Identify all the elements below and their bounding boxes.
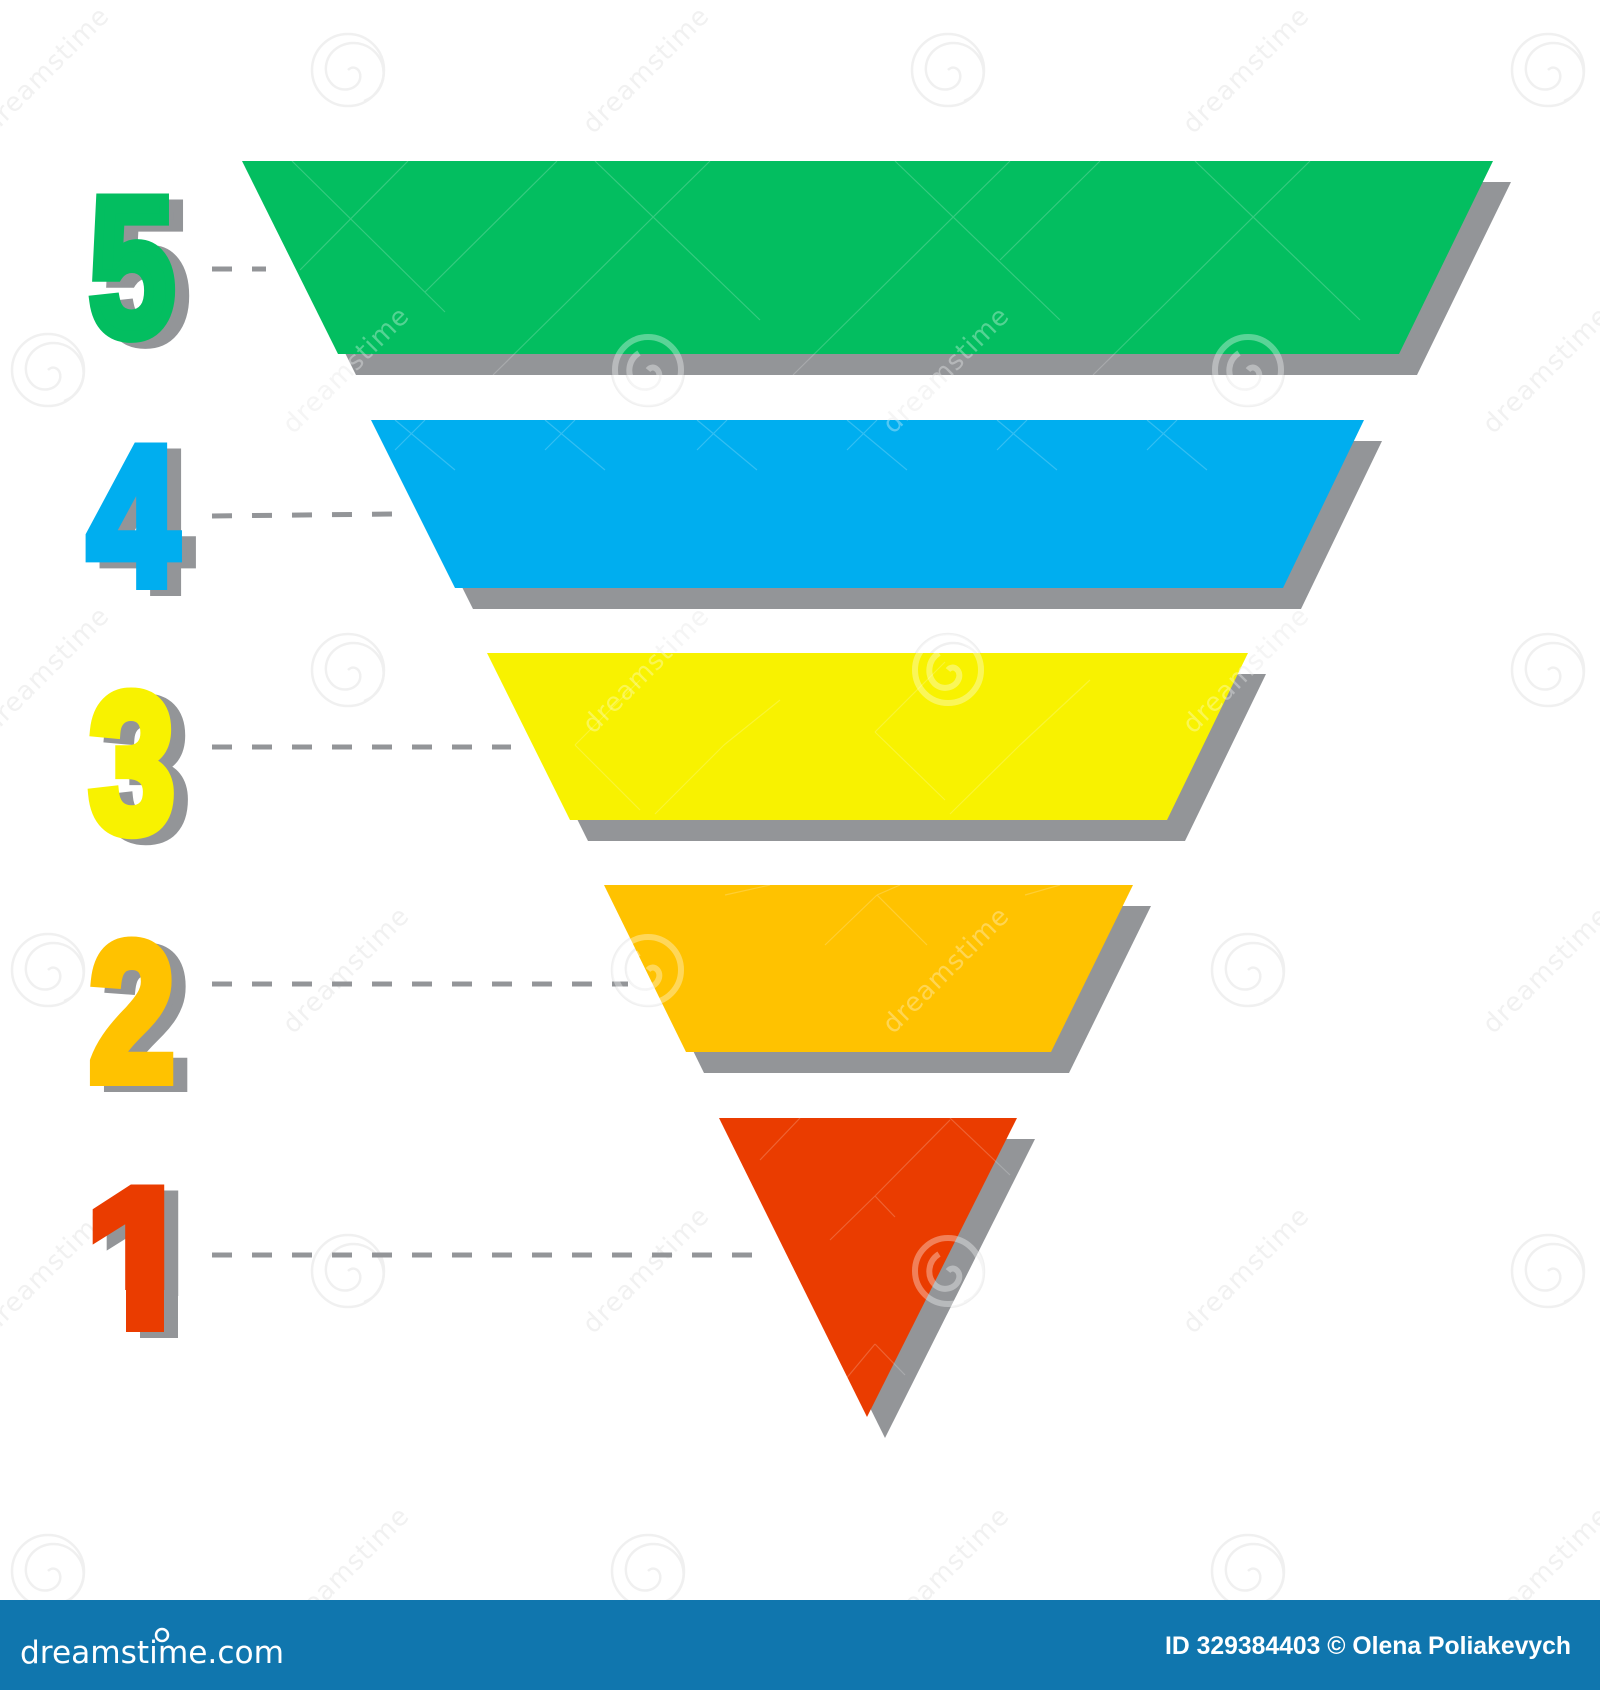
funnel tier 1: red triangle [719, 1118, 1035, 1438]
funnel tier 5: green [242, 161, 1511, 375]
watermark text on white: dreamstime [1177, 601, 1316, 740]
footer bar [0, 1600, 1600, 1690]
number 4: 4 [88, 407, 178, 627]
watermark text over shapes: dreamstime [877, 901, 1016, 1040]
number 5: 5 [89, 158, 175, 377]
dashed leader 1 [212, 1252, 752, 1258]
number 3: 3 [89, 654, 175, 873]
watermark text on white: dreamstime [577, 1, 716, 140]
watermark text on white: dreamstime [877, 1501, 1016, 1640]
watermark text on white: dreamstime [877, 901, 1016, 1040]
watermark text on white: dreamstime [877, 301, 1016, 440]
dashed leader 3 [212, 744, 511, 750]
watermark spirals over shapes [615, 337, 1281, 1304]
dashed leader 2 [212, 982, 628, 986]
watermark text on white: dreamstime [577, 601, 716, 740]
number 5: 5 [103, 164, 189, 383]
footer logo: dreamstime.com [20, 1635, 284, 1671]
funnel tier 3: yellow [487, 653, 1266, 841]
watermark text on white: dreamstime [277, 301, 416, 440]
watermark text on white: dreamstime [277, 1501, 416, 1640]
watermark text over shapes: dreamstime [277, 301, 416, 440]
watermark text on white: dreamstime [577, 1201, 716, 1340]
watermark text over shapes: dreamstime [1177, 601, 1316, 740]
number 2: 2 [89, 903, 175, 1122]
number 2: 2 [103, 909, 189, 1128]
faint watermark net lines over shapes [292, 161, 1360, 1380]
number 4: 4 [102, 413, 192, 633]
watermark text on white: dreamstime [1177, 1, 1316, 140]
dashed leader 4 [212, 514, 392, 516]
funnel tier 4: blue [371, 420, 1382, 609]
watermark text over shapes: dreamstime [877, 301, 1016, 440]
number 1 [92, 1184, 178, 1338]
watermark text on white: dreamstime [277, 901, 416, 1040]
dashed leader 5 [212, 266, 266, 272]
footer credit: ID 329384403 © Olena Poliakevych [1165, 1632, 1571, 1660]
watermark text over shapes: dreamstime [577, 601, 716, 740]
watermark text on white: dreamstime [1177, 1201, 1316, 1340]
number 3: 3 [103, 660, 189, 879]
number 1: 1 [99, 1154, 209, 1374]
funnel tier 2: orange [604, 885, 1151, 1073]
number 1: 1 [85, 1148, 195, 1368]
watermark text over shapes [277, 301, 1316, 1040]
